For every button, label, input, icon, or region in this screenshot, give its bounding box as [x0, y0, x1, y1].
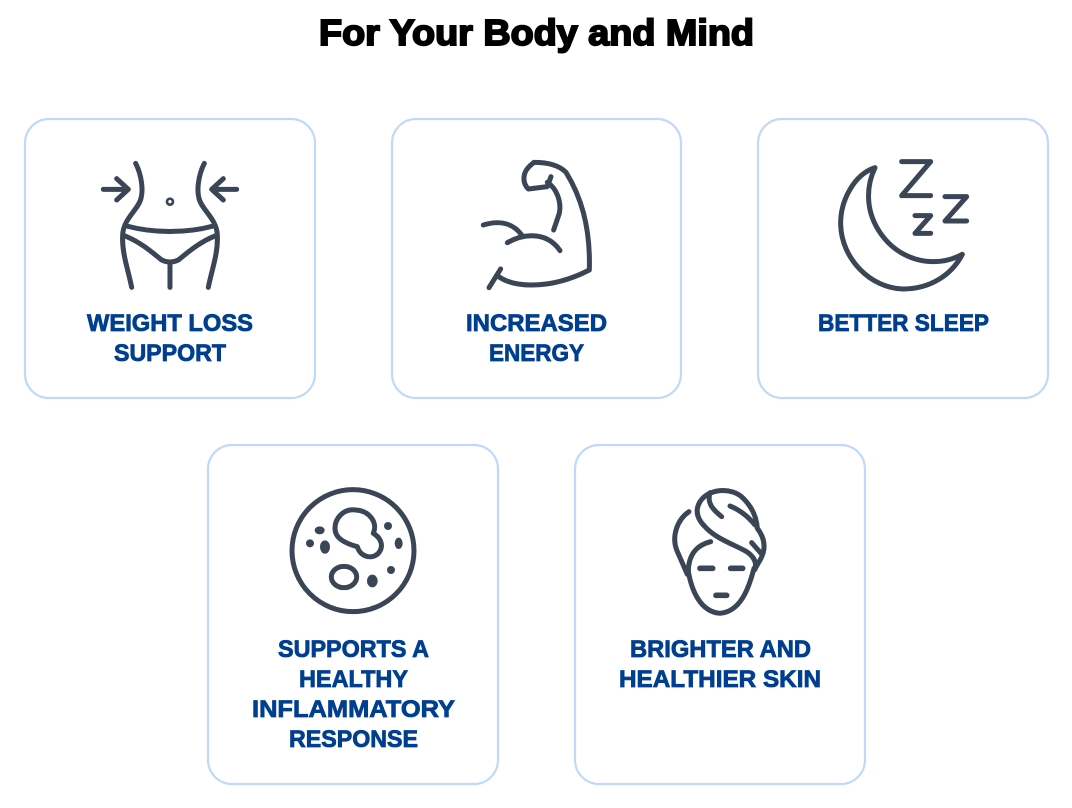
panel: increased energy — [392, 119, 681, 398]
label: supports a healthy inflammatory response: HEALTHY — [299, 666, 408, 693]
icon: cell with spots — [292, 490, 414, 612]
label: increased energy: INCREASED — [466, 310, 607, 337]
panel: better sleep — [758, 119, 1048, 398]
label: weight loss support — [87, 310, 253, 367]
label: brighter and healthier skin: HEALTHIER SKIN — [619, 666, 821, 693]
label: better sleep: BETTER SLEEP — [818, 310, 989, 337]
panel: weight loss support — [25, 119, 315, 398]
icon: crescent moon and Zs — [841, 162, 967, 289]
title: For Your Body and Mind — [319, 12, 754, 53]
label: supports a healthy inflammatory response — [252, 636, 455, 753]
label: supports a healthy inflammatory response: RESPONSE — [289, 726, 418, 753]
label: supports a healthy inflammatory response: INFLAMMATORY — [252, 696, 455, 723]
label: brighter and healthier skin: BRIGHTER AND — [630, 636, 811, 663]
label: brighter and healthier skin — [619, 636, 821, 693]
panel: brighter and healthier skin — [575, 445, 865, 784]
label: supports a healthy inflammatory response: SUPPORTS A — [278, 636, 429, 663]
label: weight loss support: SUPPORT — [114, 340, 226, 367]
label: increased energy — [466, 310, 607, 367]
icon: waist with arrows — [103, 163, 237, 287]
label: increased energy: ENERGY — [489, 340, 584, 367]
panel: supports a healthy inflammatory response — [208, 445, 498, 784]
label: weight loss support: WEIGHT LOSS — [87, 310, 253, 337]
icon: face with towel wrap — [675, 491, 764, 613]
icon: flexed arm — [483, 162, 589, 288]
